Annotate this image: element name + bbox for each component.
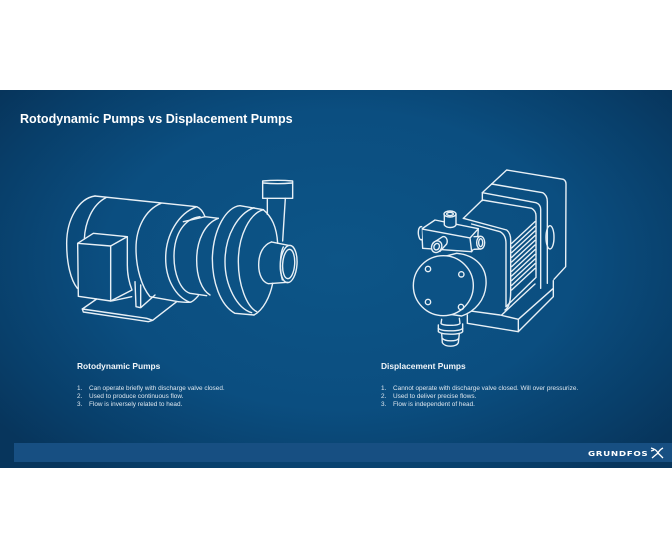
fins: [512, 222, 535, 290]
base: [467, 311, 518, 332]
list: displacement pump facts: 2.: [381, 393, 386, 400]
front housing: [463, 200, 536, 307]
footer bar: [14, 443, 672, 462]
logo: Grundfos: [588, 447, 664, 458]
list: displacement pump facts: Cannot operate with discharge valve closed. Will over pressurize.: [393, 384, 578, 392]
right port: [473, 236, 481, 249]
list: rotodynamic pump facts: 3.: [77, 401, 82, 408]
title: Rotodynamic Pumps vs Displacement Pumps: [20, 112, 293, 126]
logo wordmark: GRUNDFOS: [588, 449, 648, 458]
blueprint slide background: [0, 90, 672, 468]
heading: displacement pumps: Displacement Pumps: [381, 361, 466, 371]
list: displacement pump facts: 1.: [381, 384, 386, 392]
outlet: [259, 242, 287, 284]
list: rotodynamic pump facts: 1.: [77, 384, 82, 392]
discharge pipe: [267, 198, 285, 241]
list: rotodynamic pump facts: Can operate briefly with discharge valve closed.: [89, 384, 225, 392]
list: rotodynamic pump facts: Used to produce continuous flow.: [89, 393, 183, 400]
top nozzle: [444, 214, 456, 227]
panel: rotodynamic pumps text: [77, 361, 225, 408]
side port: [433, 237, 447, 251]
manifold: [422, 220, 478, 252]
terminal box: [78, 243, 111, 301]
list: rotodynamic pump facts: Flow is inversely related to head.: [89, 401, 182, 408]
logo mark: [650, 447, 664, 458]
heading: rotodynamic pumps: Rotodynamic Pumps: [77, 361, 160, 371]
list: rotodynamic pump facts: 2.: [77, 393, 82, 400]
diaphragm head: [443, 253, 486, 316]
bottom connector: [441, 318, 460, 325]
rear housing: [492, 170, 566, 279]
list: displacement pump facts: [381, 384, 578, 408]
list: displacement pump facts: Flow is independent of head.: [393, 401, 475, 408]
panel: displacement pumps text: [381, 361, 578, 408]
list: rotodynamic pump facts: [77, 384, 225, 408]
feet: [82, 299, 177, 322]
list: displacement pump facts: Used to deliver precise flows.: [393, 393, 476, 400]
list: displacement pump facts: 3.: [381, 401, 386, 408]
